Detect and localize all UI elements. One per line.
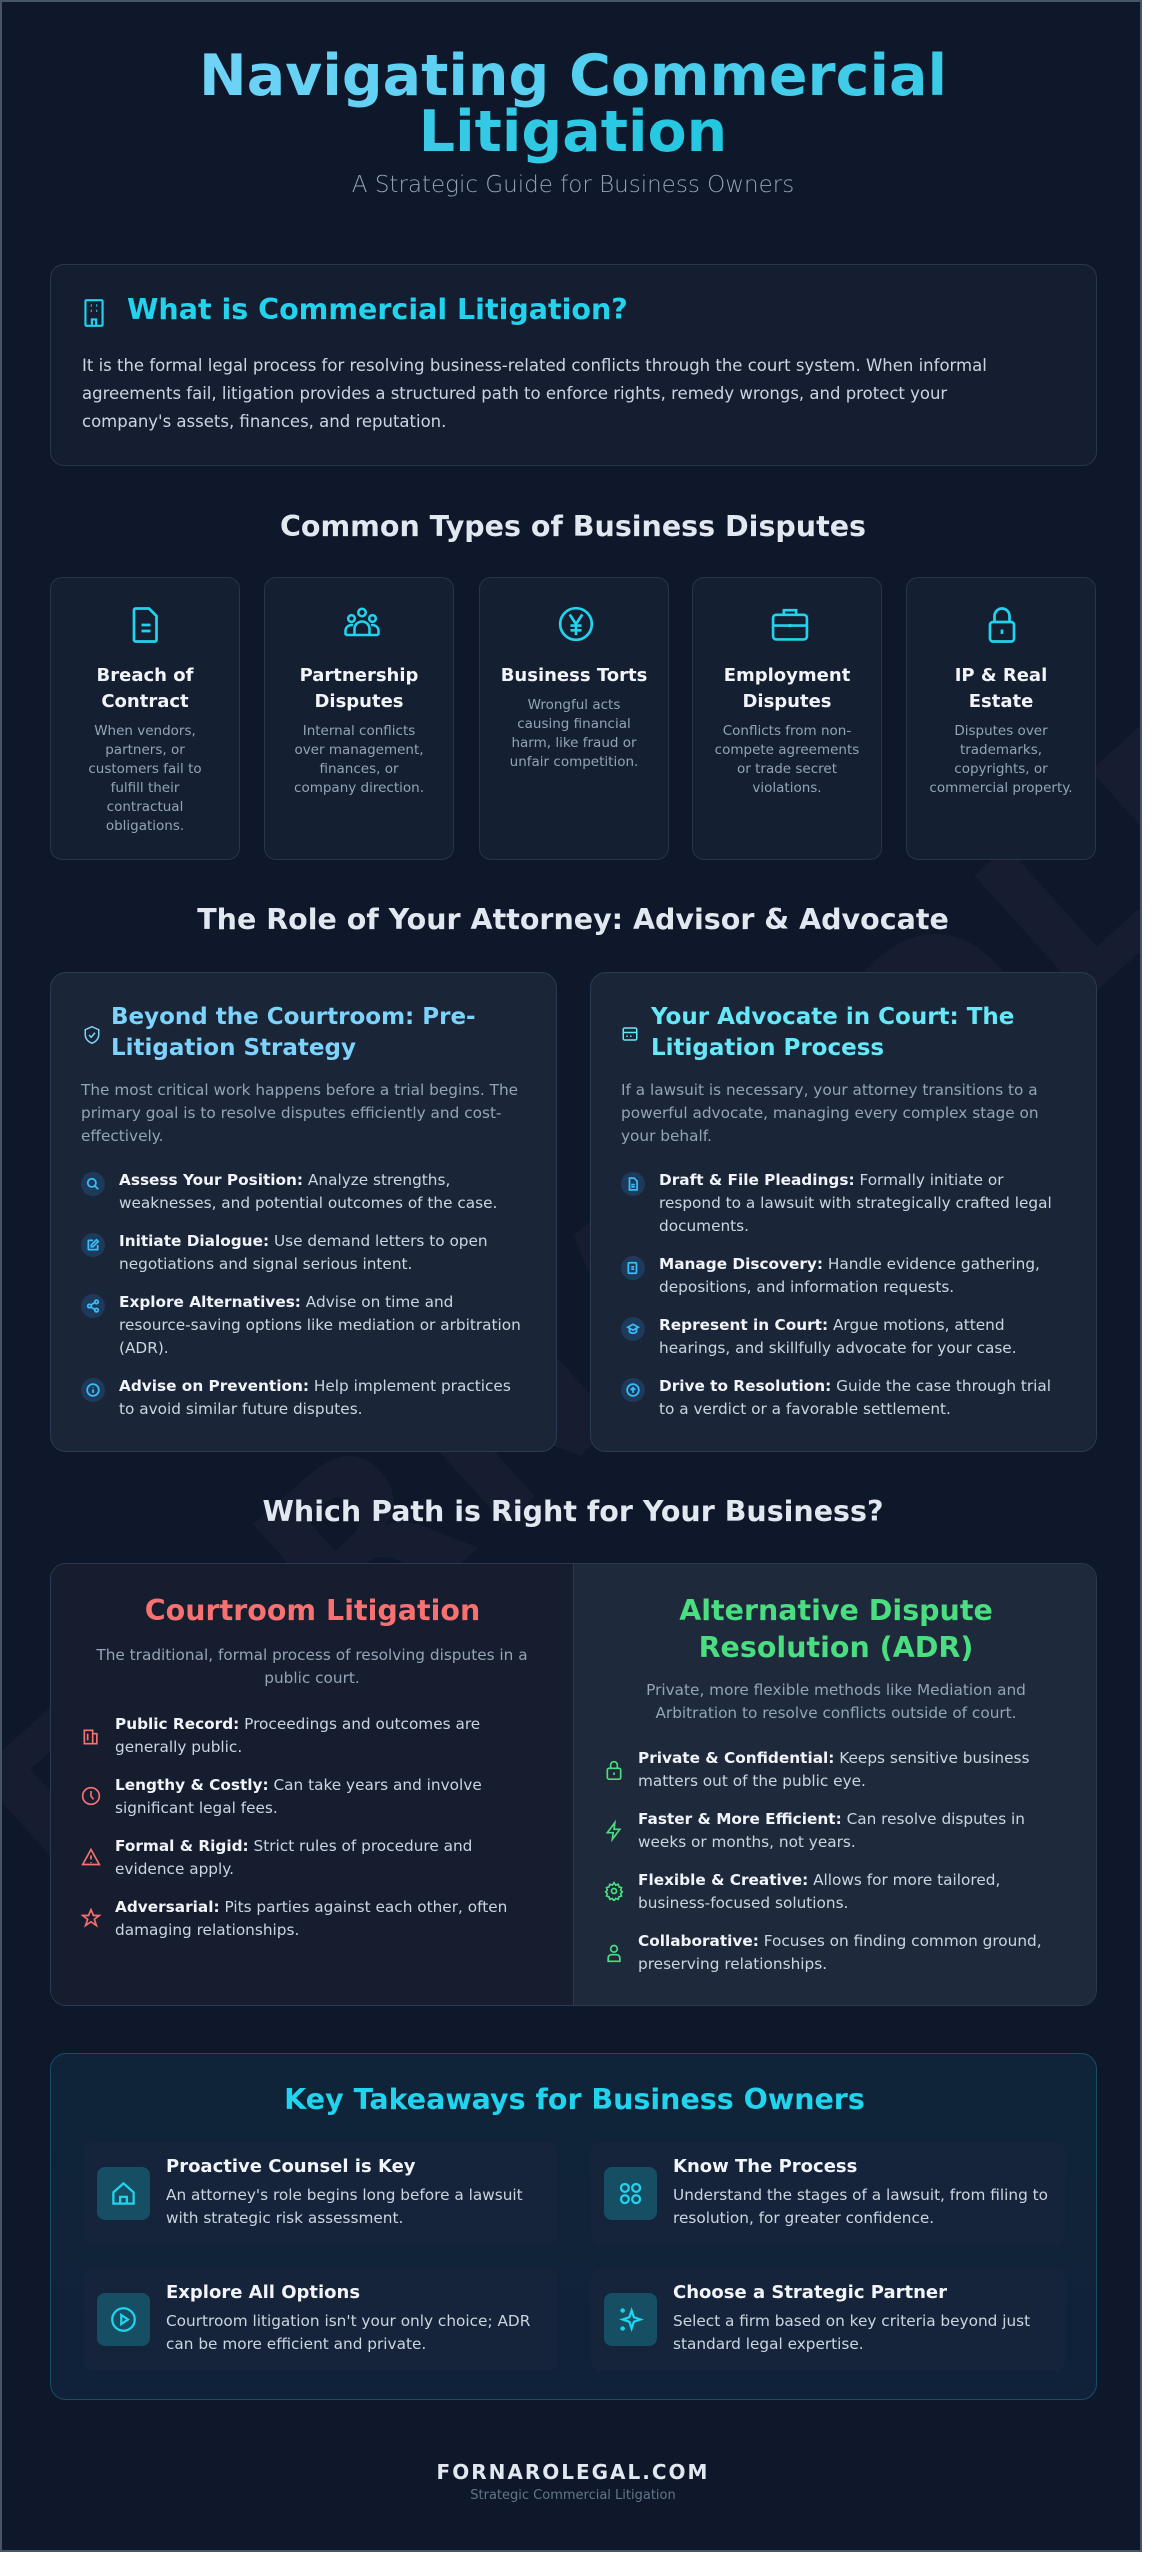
footer: Strategic Commercial Litigation	[470, 2488, 676, 2503]
card: employment disputes: Conflicts from non-compete agreements or trade secret violations.	[715, 723, 859, 796]
takeaway: strategic partner: Select a firm based on key criteria beyond just standard legal expertise.	[673, 2312, 1030, 2353]
icon: building	[84, 299, 104, 327]
card: breach of contract: Breach of Contract	[97, 665, 193, 712]
takeaway: explore all options: Courtroom litigation isn't your only choice; ADR can be more efficient and private.	[166, 2312, 530, 2353]
panel: dispute cards	[50, 577, 1096, 860]
heading: Resolution (ADR)	[699, 1631, 973, 1664]
card: business torts: Wrongful acts causing financial harm, like fraud or unfair competition.	[510, 697, 638, 770]
card: employment disputes	[692, 577, 882, 860]
icon: shield	[84, 1026, 100, 1044]
heading	[679, 1594, 993, 1664]
takeaway: proactive counsel: An attorney's role begins long before a lawsuit with strategic risk assessment.	[166, 2186, 523, 2227]
takeaway: strategic partner: Choose a Strategic Partner	[673, 2282, 947, 2303]
takeaway: proactive counsel: Proactive Counsel is Key	[166, 2156, 416, 2177]
card: partnership disputes: Partnership Disputes	[300, 665, 418, 712]
item: private: Private & Confidential: Keeps sensitive business matters out of the public eye.	[638, 1749, 1029, 1790]
footer: FORNAROLEGAL.COM	[437, 2460, 709, 2484]
card: partnership disputes	[264, 577, 454, 860]
takeaway: explore all options: Explore All Options	[166, 2282, 360, 2303]
takeaway: explore all options	[84, 2268, 558, 2371]
item: formal & rigid: Formal & Rigid: Strict rules of procedure and evidence apply.	[115, 1837, 472, 1878]
panel: comparison	[50, 1563, 1097, 2006]
item: drive to resolution: Drive to Resolution: Guide the case through trial to a verdict or a favorable settlement.	[659, 1377, 1051, 1418]
card: breach of contract	[50, 577, 240, 860]
heading: Key Takeaways for Business Owners	[284, 2083, 865, 2116]
heading: Courtroom Litigation	[145, 1594, 480, 1627]
title: Litigation	[419, 99, 727, 165]
item: flexible: Flexible & Creative: Allows for more tailored, business-focused solutions.	[638, 1871, 1000, 1912]
card: ip & real estate	[906, 577, 1096, 860]
card: partnership disputes: Internal conflicts over management, finances, or company direction.	[294, 723, 424, 796]
card: ip & real estate: IP & Real Estate	[955, 665, 1047, 712]
heading: Your Advocate in Court: The Litigation Process	[651, 1004, 1014, 1061]
takeaway: know the process: Understand the stages of a lawsuit, from filing to resolution, for greater confidence.	[673, 2186, 1048, 2227]
takeaway: know the process: Know The Process	[673, 2156, 857, 2177]
card: business torts: Business Torts	[501, 665, 647, 686]
item: assess: Assess Your Position: Analyze strengths, weaknesses, and potential outcomes of the case.	[119, 1171, 497, 1212]
card: ip & real estate: Disputes over trademarks, copyrights, or commercial property.	[929, 723, 1073, 796]
item: adversarial: Adversarial: Pits parties against each other, often damaging relationships.	[115, 1898, 507, 1939]
icon: card	[622, 1027, 638, 1041]
heading: role of attorney: The Role of Your Attorney: Advisor & Advocate	[197, 903, 949, 936]
item: faster: Faster & More Efficient: Can resolve disputes in weeks or months, not years.	[638, 1810, 1025, 1851]
takeaway: know the process	[591, 2142, 1065, 2245]
item: draft & file: Draft & File Pleadings: Formally initiate or respond to a lawsuit with strategically crafted legal documents.	[659, 1171, 1052, 1235]
text block: It is the formal legal process for resolving business-related conflicts through the court system. When informal agreements fail, litigation provides a structured path to enforce rights, remedy wrongs, and protect your company's assets, finances, and reputation.	[82, 356, 987, 431]
card: breach of contract: When vendors, partners, or customers fail to fulfill their contractual obligations.	[88, 723, 202, 834]
heading: What is Commercial Litigation?	[127, 293, 628, 326]
heading: which path: Which Path is Right for Your Business?	[262, 1495, 884, 1528]
card: employment disputes: Employment Disputes	[724, 665, 850, 712]
item: lengthy & costly: Lengthy & Costly: Can take years and involve significant legal fees.	[115, 1776, 482, 1817]
item: advise on prevention: Advise on Prevention: Help implement practices to avoid similar future disputes.	[119, 1377, 511, 1418]
heading: Beyond the Courtroom: Pre-Litigation Strategy	[111, 1004, 476, 1061]
description: The traditional, formal process of resolving disputes in a public court.	[96, 1646, 528, 1687]
item: represent in court: Represent in Court: Argue motions, attend hearings, and skillfully advocate for your case.	[659, 1316, 1017, 1357]
column: courtroom litigation	[51, 1564, 574, 2007]
card: business torts	[479, 577, 669, 860]
item: explore alternatives: Explore Alternatives: Advise on time and resource-saving options like mediation or arbitration (ADR).	[119, 1293, 521, 1357]
description: Private, more flexible methods like Mediation and Arbitration to resolve conflicts outside of court.	[646, 1681, 1026, 1722]
heading: common types: Common Types of Business Disputes	[280, 510, 866, 543]
panel: litigation process	[590, 972, 1097, 1452]
intro: The most critical work happens before a trial begins. The primary goal is to resolve disputes efficiently and cost-effectively.	[81, 1081, 518, 1145]
panel: pre-litigation strategy	[50, 972, 557, 1452]
item: collaborative: Collaborative: Focuses on finding common ground, preserving relationships.	[638, 1932, 1042, 1973]
intro: If a lawsuit is necessary, your attorney transitions to a powerful advocate, managing every complex stage on your behalf.	[621, 1081, 1039, 1145]
heading: Alternative Dispute	[679, 1594, 993, 1627]
title	[199, 43, 947, 165]
item: manage discovery: Manage Discovery: Handle evidence gathering, depositions, and information requests.	[659, 1255, 1040, 1296]
panel: what is commercial litigation	[50, 264, 1097, 466]
item: initiate dialogue: Initiate Dialogue: Use demand letters to open negotiations and signal serious intent.	[119, 1232, 488, 1273]
item: public record: Public Record: Proceedings and outcomes are generally public.	[115, 1715, 480, 1756]
takeaway: proactive counsel	[84, 2142, 558, 2245]
subtitle: A Strategic Guide for Business Owners	[352, 172, 794, 198]
title: Navigating Commercial	[199, 43, 947, 109]
column: ADR	[574, 1564, 1098, 2007]
takeaway: strategic partner	[591, 2268, 1065, 2371]
panel: key takeaways	[50, 2053, 1097, 2400]
footer	[437, 2460, 709, 2503]
